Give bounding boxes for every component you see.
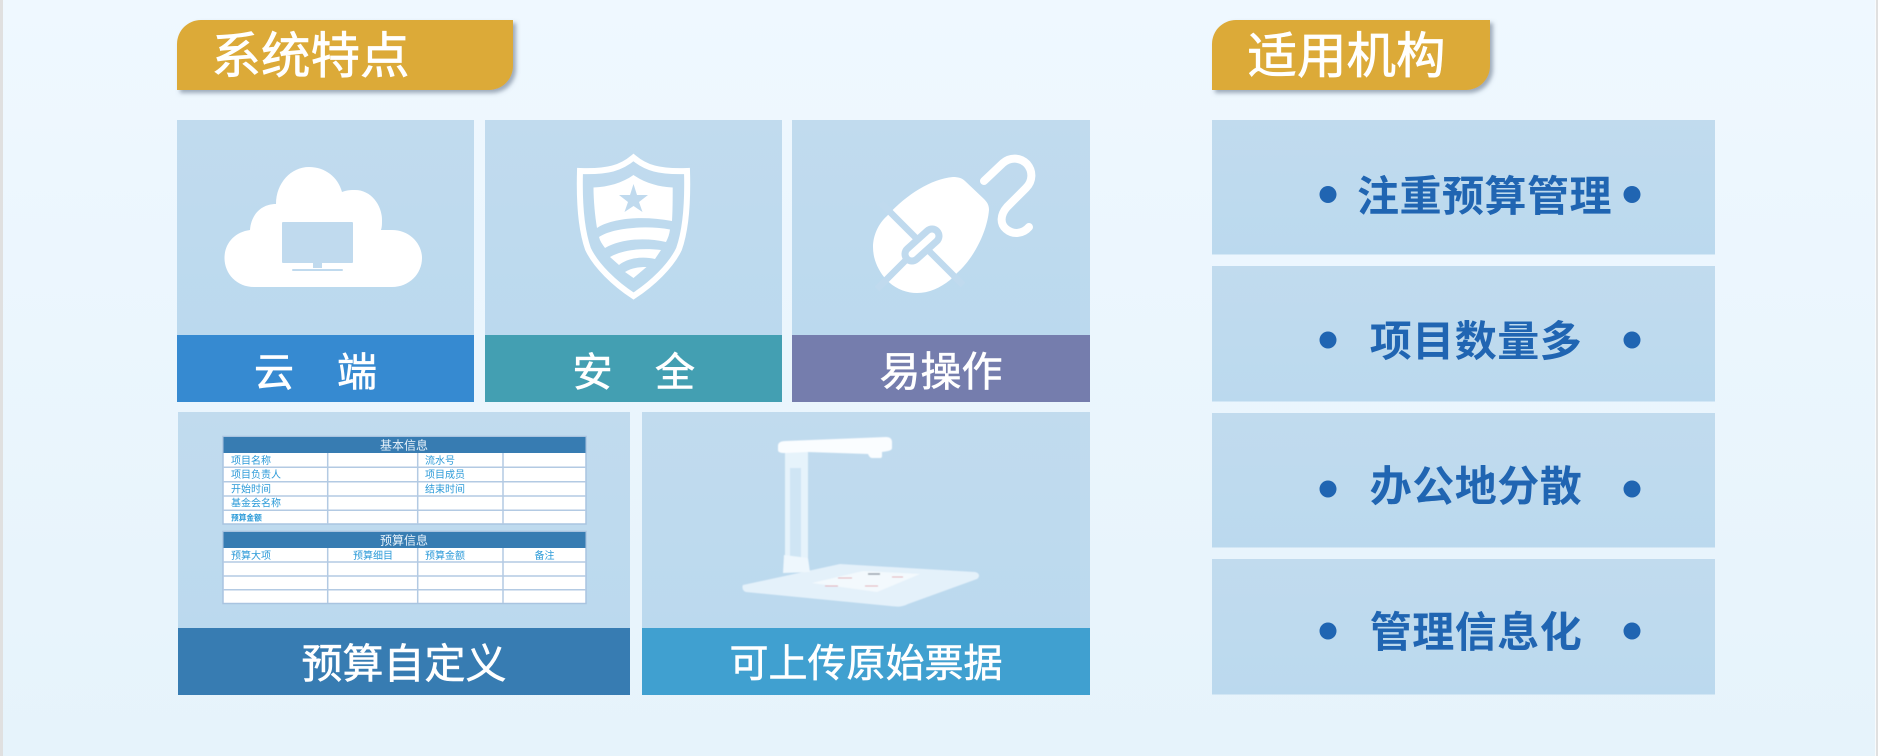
label: 安全: 安全: [572, 351, 695, 395]
label: 预算自定义: 预算自定义: [302, 641, 506, 687]
panel: 预算自定义: [178, 412, 630, 695]
panel: 注重预算管理: [1212, 120, 1715, 254]
table: 基本信息: [223, 436, 586, 524]
table: 基本信息: 项目成员: [425, 469, 465, 481]
illustration: document scanner: [742, 437, 979, 607]
table: 预算信息: 预算大项: [231, 549, 271, 562]
table: 基本信息: 基本信息: [380, 438, 428, 452]
icon: shield: [580, 158, 687, 296]
table: 基本信息: 预算金额: [231, 512, 262, 522]
heading: 系统特点: [177, 20, 513, 90]
panel: 安全: [485, 120, 782, 402]
icon: cloud with monitor: [224, 167, 422, 287]
label: 云端: 云端: [254, 351, 377, 395]
panel: 办公地分散: [1212, 413, 1715, 548]
panel: 注重预算管理: 注重预算管理: [1357, 173, 1612, 220]
label: 云端: [177, 335, 474, 402]
panel: 项目数量多: 项目数量多: [1370, 318, 1582, 365]
label: 安全: [485, 335, 782, 402]
label: 预算自定义: [178, 628, 630, 695]
label: 易操作: [792, 335, 1090, 402]
table: 基本信息: 流水号: [425, 454, 455, 467]
label: 可上传原始票据: 可上传原始票据: [729, 643, 1003, 686]
panel: 项目数量多: [1212, 266, 1715, 402]
icon: mouse: [873, 159, 1031, 293]
label: 易操作: 易操作: [880, 349, 1002, 395]
panel: 办公地分散: 办公地分散: [1370, 463, 1582, 510]
table: 基本信息: 开始时间: [231, 482, 271, 496]
heading: 适用机构: 适用机构: [1248, 29, 1446, 84]
panel: 管理信息化: [1212, 559, 1715, 694]
label: 可上传原始票据: [642, 628, 1090, 695]
table: 预算信息: 备注: [534, 549, 554, 562]
table: 预算信息: 预算信息: [380, 532, 428, 548]
panel: 云端: [177, 120, 474, 402]
panel: 管理信息化: 管理信息化: [1370, 609, 1582, 656]
table: 预算信息: 预算细目: [353, 549, 393, 562]
table: 基本信息: 结束时间: [425, 482, 465, 496]
panel: 可上传原始票据: [642, 412, 1090, 695]
table: 基本信息: 项目名称: [231, 454, 271, 467]
table: 基本信息: 项目负责人: [231, 468, 281, 481]
panel: 易操作: [792, 120, 1090, 402]
table: 预算信息: [223, 532, 586, 604]
heading: 适用机构: [1212, 20, 1490, 90]
heading: 系统特点: 系统特点: [212, 29, 410, 84]
table: 预算信息: 预算金额: [425, 549, 465, 562]
table: 基本信息: 基金会名称: [231, 496, 281, 510]
